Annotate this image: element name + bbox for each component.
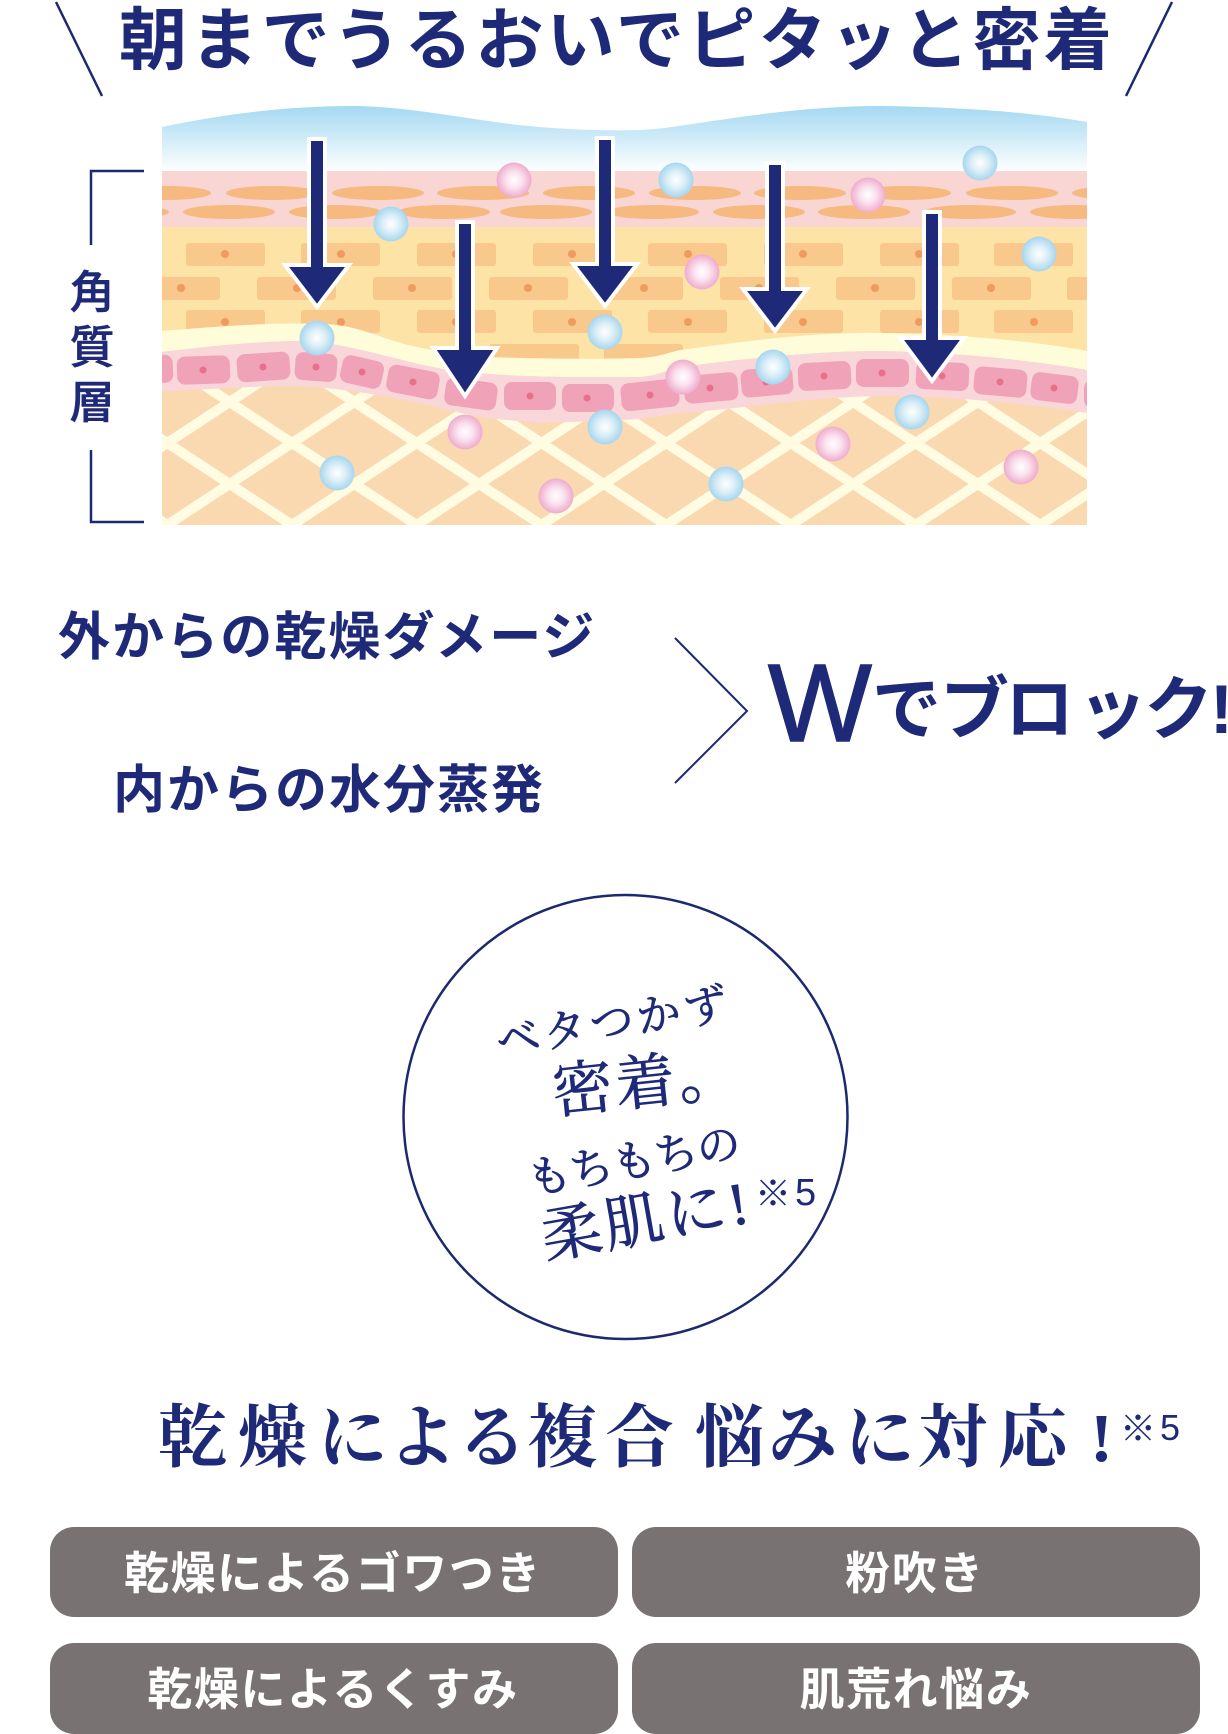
W block text: W <box>768 642 872 765</box>
skin layer diagram <box>162 106 1087 525</box>
footnote mark: 5 <box>1160 1407 1180 1448</box>
pink upper layer <box>162 171 1087 227</box>
footnote mark: 5 <box>795 1172 816 1214</box>
circle callout <box>404 895 848 1339</box>
W block text: でブロック! <box>872 671 1228 748</box>
tag: roughness: 乾燥によるゴワつき <box>124 1548 542 1599</box>
arrows <box>285 138 964 396</box>
bracket: stratum corneum <box>69 171 144 522</box>
double block message <box>58 609 1228 820</box>
label 角質層 <box>69 267 115 428</box>
right slash <box>1126 2 1172 96</box>
footnote mark <box>755 1172 816 1214</box>
callout text: 柔肌に! <box>536 1169 757 1271</box>
title <box>56 2 1172 96</box>
footnote mark <box>1120 1407 1180 1449</box>
label 角質層: 角 <box>69 267 115 318</box>
moisture bubbles <box>300 146 1056 502</box>
sky layer <box>162 106 1087 172</box>
yellow brick layer <box>162 227 1087 359</box>
tag: roughness <box>50 1527 618 1617</box>
footnote mark: ※ <box>755 1174 791 1214</box>
label 角質層: 質 <box>69 322 115 373</box>
callout text <box>492 979 757 1271</box>
circle outline <box>404 895 848 1339</box>
left slash <box>56 2 102 96</box>
label 角質層: 層 <box>69 377 115 428</box>
callout text: 密着。 <box>549 1040 744 1126</box>
cream band <box>162 324 1087 378</box>
tag: flaking <box>632 1527 1200 1617</box>
inner evaporation text: 内からの水分蒸発 <box>113 762 545 820</box>
concern tags <box>50 1527 1200 1734</box>
tag: dullness <box>50 1643 618 1734</box>
tag: flaking: 粉吹き <box>845 1548 985 1599</box>
outer damage text: 外からの乾燥ダメージ <box>58 609 596 667</box>
footnote mark: ※ <box>1120 1409 1156 1449</box>
callout text: もちもちの <box>523 1119 744 1205</box>
W block text <box>768 642 1228 765</box>
tag: rough skin <box>632 1643 1200 1734</box>
tag: dullness: 乾燥によるくすみ <box>147 1664 519 1715</box>
tag: rough skin: 肌荒れ悩み <box>799 1664 1033 1715</box>
pink bubbles <box>448 162 1038 514</box>
callout text: ベタつかず <box>492 979 735 1066</box>
heading text: 乾燥による複合悩みに対応! <box>158 1400 1113 1476</box>
pink cell band <box>162 341 1087 422</box>
section heading <box>158 1400 1180 1476</box>
bracket bottom <box>91 450 144 522</box>
pink cells <box>149 351 1104 412</box>
bracket top <box>91 171 144 245</box>
chevron <box>675 638 747 783</box>
tan dermis with lattice <box>162 341 1087 525</box>
heading text: 朝までうるおいでピタッと密着 <box>119 3 1115 79</box>
